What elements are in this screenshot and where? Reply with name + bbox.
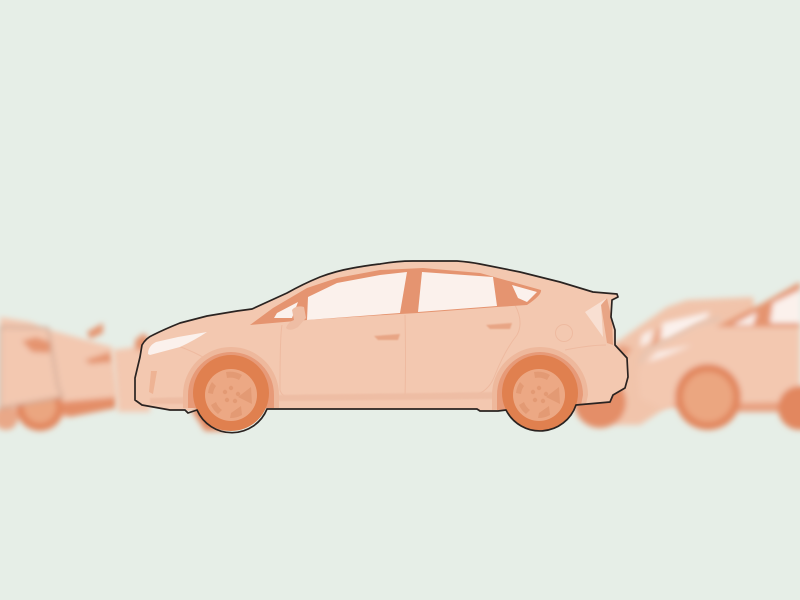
tail light [601,298,613,345]
side mirror [286,306,306,330]
windows [274,272,537,320]
blurred car: right, near [638,282,800,430]
car outline [135,261,628,433]
front side marker [149,371,157,394]
blurred car: far left, rear [0,317,118,431]
door handles [374,323,512,340]
body panel lines [178,305,606,399]
front wheel [183,347,279,431]
lower sill shade [150,392,500,404]
blurred car: behind front bumper [113,333,240,431]
main car [135,261,628,433]
car body [135,261,628,411]
rear wheel [492,347,588,431]
window frame [250,268,541,325]
headlight [148,332,207,355]
blurred car: right, far behind [574,297,760,428]
